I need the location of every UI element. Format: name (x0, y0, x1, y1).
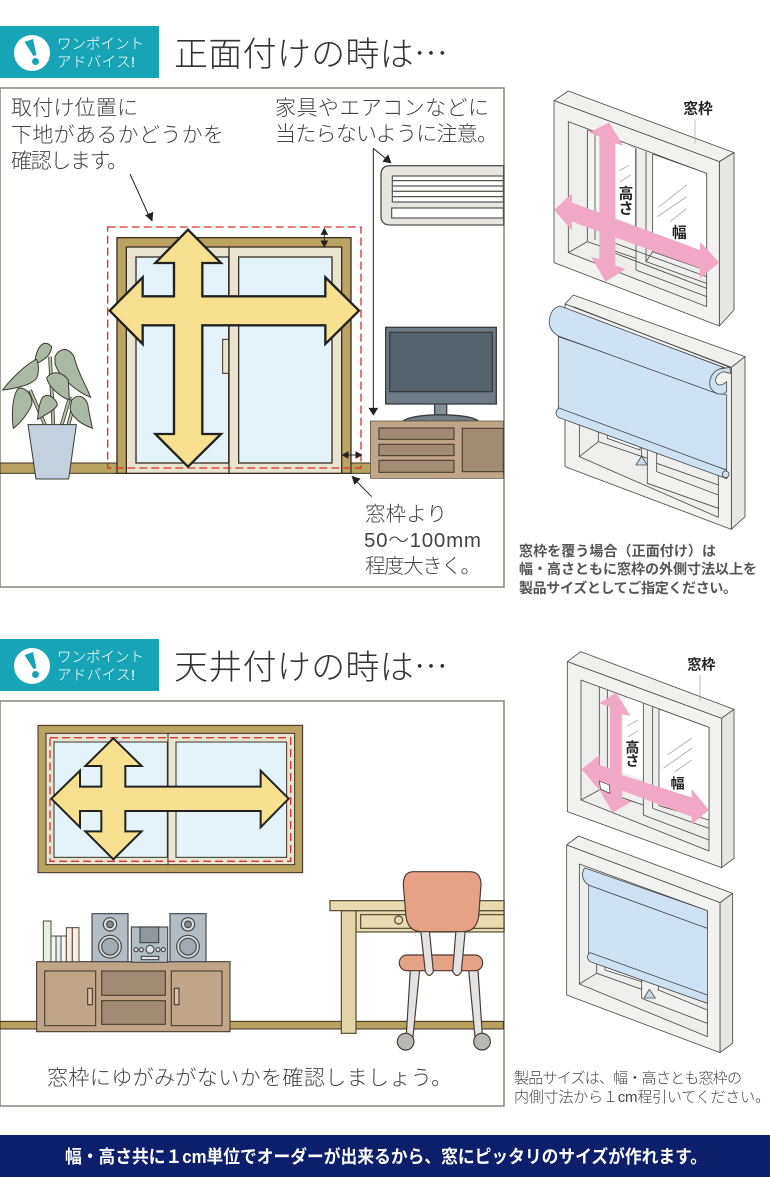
dimension arrows (130, 174, 372, 497)
header badge: one point advice (front mount): アドバイス! (57, 55, 135, 71)
footer banner (0, 1135, 770, 1177)
books (43, 921, 79, 962)
desk (330, 901, 504, 1033)
header badge: one point advice (ceiling mount) (0, 639, 159, 691)
plant (3, 343, 92, 479)
labels: height, width, frame: 窓枠 (683, 99, 713, 117)
heading: ceiling mount: 天井付けの時は… (174, 640, 448, 689)
diagram: roller blind inside the frame (567, 836, 733, 1053)
dashed mounting outline (50, 738, 291, 861)
text: avoid furniture and air conditioner: 家具やエアコンなどに (275, 97, 489, 120)
caption: front mount: 窓枠を覆う場合（正面付け）は (519, 543, 716, 559)
caption: ceiling mount: 製品サイズは、幅・高さとも窓枠の (514, 1070, 742, 1087)
illustration: front mount scene (0, 148, 504, 497)
text: check for frame distortion: 窓枠にゆがみがないかを確認しましょう。 (47, 1067, 452, 1090)
air conditioner (381, 166, 504, 225)
text: avoid furniture and air conditioner: 当たらないように注意。 (275, 123, 498, 146)
text: check the base material: 下地があるかどうかを (11, 124, 224, 147)
caption: front mount: 幅・高さともに窓枠の外側寸法以上を (519, 561, 757, 577)
window (38, 725, 303, 873)
diagram: measuring the inner frame (567, 652, 734, 868)
labels: height, width, frame: 高 (619, 185, 633, 202)
labels: height, width, frame: 窓枠 (687, 656, 715, 672)
labels: height, width, frame: さ (625, 753, 639, 769)
caption: front mount (519, 543, 757, 596)
pink arrows: width and height (582, 693, 709, 824)
footer banner: 幅・高さ共に１cm単位でオーダーが出来るから、窓にピッタリのサイズが作れます。 (65, 1146, 707, 1167)
header badge: one point advice (ceiling mount): アドバイス! (57, 668, 135, 684)
header badge: one point advice (front mount): ワンポイント (57, 36, 144, 53)
pink arrows: width and height (554, 122, 719, 282)
text: 50 to 100mm larger than frame: 程度大きく。 (365, 555, 481, 578)
labels: height, width, frame: 幅 (671, 775, 685, 791)
text: avoid furniture and air conditioner (275, 97, 498, 146)
yellow arrows: width and height (51, 738, 289, 859)
labels: height, width, frame (625, 656, 715, 791)
labels: height, width, frame: 高 (625, 739, 639, 755)
labels: height, width, frame (619, 99, 713, 241)
chair (397, 872, 490, 1050)
text: 50 to 100mm larger than frame (364, 503, 481, 578)
diagram: measuring the outer frame (554, 91, 734, 326)
labels: height, width, frame: 幅 (672, 224, 687, 241)
labels: height, width, frame: さ (619, 200, 633, 217)
dashed mounting outline (108, 227, 361, 468)
stereo system (92, 914, 206, 962)
text: 50 to 100mm larger than frame: 50～100mm (364, 529, 481, 552)
header badge: one point advice (ceiling mount): ワンポイント (57, 649, 144, 666)
heading: front mount: 正面付けの時は… (174, 27, 448, 76)
diagram: roller blind over the frame (549, 295, 745, 529)
text: check the base material (11, 97, 224, 173)
panel: ceiling mount room scene (0, 701, 504, 1106)
yellow arrows: width and height (110, 230, 359, 467)
window (117, 238, 351, 473)
text: check the base material: 取付け位置に (11, 97, 138, 120)
text: check the base material: 確認します。 (11, 150, 128, 173)
skirting board (0, 1021, 503, 1029)
header badge: one point advice (front mount) (0, 26, 159, 78)
TV stand (370, 421, 503, 478)
skirting board (0, 463, 503, 473)
air conditioner clearance arrow (369, 148, 391, 415)
television (386, 327, 496, 421)
cabinet (37, 962, 230, 1032)
panel: front mount room scene (0, 88, 504, 587)
caption: front mount: 製品サイズとしてご指定ください。 (519, 580, 737, 596)
text: 50 to 100mm larger than frame: 窓枠より (365, 503, 447, 526)
illustration: ceiling mount scene (0, 725, 504, 1050)
caption: ceiling mount (514, 1070, 770, 1106)
caption: ceiling mount: 内側寸法から１cm程引いてください。 (514, 1089, 770, 1106)
